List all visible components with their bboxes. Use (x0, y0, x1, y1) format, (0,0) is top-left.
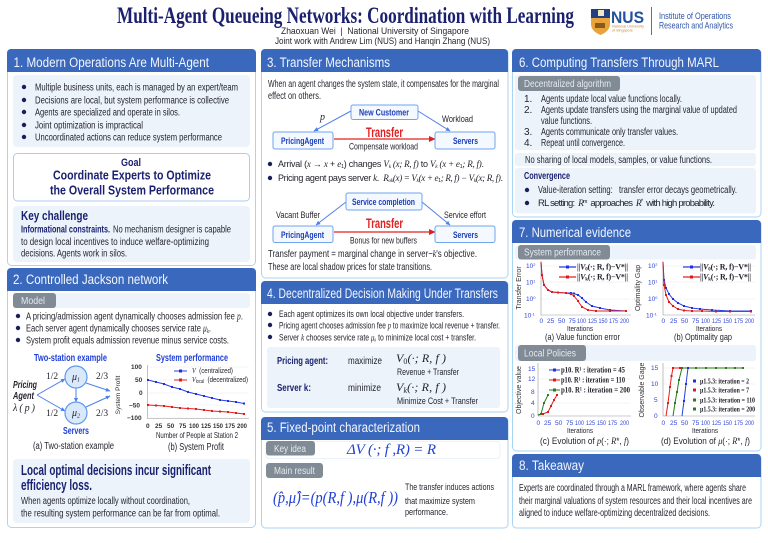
algorithm: value functions. (541, 116, 592, 127)
title: Multi-Agent Queueing Networks: Coordination with Learning (117, 3, 574, 29)
main result: The transfer induces actions (405, 482, 494, 493)
bullet list: Multiple business units, each is managed by an expert/team (35, 82, 238, 94)
chart b: optimality gap: (·; R, f)−V*|| (711, 272, 751, 282)
no sharing note: No sharing of local models, samples, or value functions. (525, 155, 712, 166)
chart d: evolution of mu: 100 (701, 420, 710, 427)
chart b: optimality gap: ||V (700, 272, 708, 282)
chart: system profit: 0 (146, 423, 150, 430)
authors: Zhaoxuan Wei | National University of Singapore (281, 26, 469, 36)
two-station diagram: μ (72, 372, 77, 383)
chart c: evolution of p: Objective value (516, 366, 523, 414)
chart b: optimality gap: 125 (712, 318, 721, 325)
NUS logo: Research and Analytics (659, 20, 733, 32)
chart c: evolution of p: 175 (608, 420, 617, 427)
chart a: value function error: 10 (526, 296, 533, 303)
convergence: RL setting: R (538, 198, 584, 209)
algorithm: Agents update local value functions locally. (541, 94, 682, 105)
objectives box: Server k: (277, 383, 311, 394)
chart c: evolution of p: (c) Evolution of p(·; R*, f) (540, 436, 629, 447)
diagram: service completion: Servers (453, 230, 478, 241)
chart: system profit: 150 (213, 423, 223, 430)
two-station diagram: Two-station example (34, 353, 107, 364)
chart: system profit: 100 (189, 423, 199, 430)
diagram: new customer: Servers (453, 136, 478, 147)
two-station diagram: (a) Two-station example (33, 441, 114, 452)
bullets (268, 309, 500, 344)
algorithm: 2. (524, 105, 532, 116)
chart a: value function error: 75 (568, 318, 576, 325)
arrival bullets: k (435, 164, 438, 170)
chart c: evolution of p: 0 (536, 420, 540, 427)
arrival bullets: (x + e (419, 173, 438, 183)
authors (275, 26, 490, 46)
chart a: value function error: 1 (533, 278, 536, 284)
arrival bullets: ) changes (344, 159, 384, 169)
panel: 1 modern operations (7, 49, 256, 266)
main result: (p̂,μ̂)=(p(R,f ),μ(R,f )) (273, 488, 398, 507)
diagram: service completion (273, 193, 495, 246)
system performance label (515, 245, 756, 260)
chart b: optimality gap: 175 (734, 318, 743, 325)
chart a: value function error: 100 (577, 318, 586, 325)
goal box: Coordinate Experts to Optimize (53, 168, 211, 182)
bullet list: Agents are specialized and operate in silos. (35, 108, 180, 118)
chart c: evolution of p: 100 (575, 420, 584, 427)
arrival bullets: to V (421, 159, 436, 169)
bullets: k (374, 338, 377, 344)
chart a: value function error: Transfer Error (516, 266, 523, 310)
chart a: value function error: 150 (598, 318, 608, 325)
arrival bullets: V (383, 159, 390, 169)
chart b: optimality gap: 10 (646, 312, 653, 320)
heading 3: 3. Transfer Mechanisms (267, 55, 390, 70)
bullet list (13, 75, 250, 147)
convergence (515, 168, 756, 214)
arrival bullets: 1 (341, 164, 344, 170)
diagram: service completion: Bonus for new buffers (350, 236, 417, 246)
chart a: value function error: 200 (620, 318, 629, 325)
key challenge box: Key challenge (21, 208, 88, 223)
local policies label (515, 345, 756, 361)
chart b: optimality gap: 75 (692, 318, 700, 325)
chart c: evolution of p: p10. R¹ : iteration = 45 (561, 366, 625, 374)
bullet list: Decisions are local, but system performance is collective (35, 96, 229, 106)
arrival bullets: (x; R, f) (476, 173, 501, 183)
diagram: new customer: p (319, 112, 325, 123)
arrival bullets: k (417, 178, 420, 184)
key idea (266, 441, 500, 458)
chart c: evolution of p: p10. R¹ : iteration = 200 (561, 386, 630, 394)
chart d: evolution of mu: 75 (692, 420, 700, 427)
model bullets: Each server agent dynamically chooses service rate μ (26, 324, 257, 334)
key idea: Key idea (274, 444, 306, 455)
chart d: evolution of mu: 0 (654, 413, 658, 420)
chart b: optimality gap: 2 (655, 262, 658, 267)
diagram: new customer: Transfer (366, 125, 404, 140)
chart: system profit: −50 (129, 402, 140, 410)
chart a: value function error: (a) Value function error (545, 332, 620, 343)
panel: 2 controlled Jackson network (7, 268, 256, 528)
model bullets: A pricing/admission agent dynamically chooses admission fee p. (26, 312, 243, 322)
bullets: Each agent optimizes its own local objective under transfers. (279, 309, 464, 320)
chart d: evolution of mu: 5 (654, 397, 658, 404)
chart c: evolution of p: 75 (566, 420, 574, 427)
chart: system profit: 100 (131, 364, 142, 371)
arrival bullets: Arrival (x → x + e (278, 159, 341, 169)
two-station diagram: μ (72, 408, 77, 419)
chart b: optimality gap: 25 (670, 318, 678, 325)
chart b: optimality gap: 150 (723, 318, 732, 325)
chart c: evolution of p: 15 (528, 366, 536, 373)
diagram: service completion: PricingAgent (281, 230, 325, 241)
key challenge box (13, 206, 250, 262)
NUS logo: NUS (611, 8, 644, 27)
chart d: evolution of mu: μ1.5.3: iteration = 2 (700, 376, 749, 386)
shadow price note: These are local shadow prices for state transitions. (268, 262, 432, 273)
arrival bullets: k (389, 164, 392, 170)
panel: 7 numerical evidence (512, 220, 761, 451)
NUS logo: National University (612, 24, 644, 28)
chart: system profit: −100 (127, 415, 142, 422)
key challenge box: No mechanism designer is capable (113, 224, 231, 236)
bullet list: Joint optimization is impractical (35, 120, 143, 132)
two-station diagram: 1 (77, 378, 80, 384)
key challenge box: Informational constraints. (21, 224, 110, 236)
model bullets (16, 312, 243, 346)
bullets: Pricing agent chooses admission fee p to maximize local revenue + transfer. (279, 320, 500, 332)
heading 6: 6. Computing Transfers Through MARL (519, 55, 719, 70)
chart d: evolution of mu: 175 (734, 420, 743, 427)
authors: Joint work with Andrew Lim (NUS) and Hanqin Zhang (NUS) (275, 36, 490, 46)
convergence: * (641, 199, 644, 205)
chart d: evolution of mu: 10 (651, 381, 659, 388)
diagram: new customer (273, 105, 495, 152)
chart d: evolution of mu: (d) Evolution of μ(·; R*, f) (661, 436, 750, 447)
chart d: evolution of mu: 150 (723, 420, 732, 427)
convergence: approaches (587, 198, 637, 209)
efficiency loss callout: efficiency loss. (21, 478, 92, 494)
diagram: service completion: Service completion (352, 197, 415, 208)
diagram: service completion: Service effort (444, 210, 486, 220)
efficiency loss callout (13, 459, 250, 523)
chart b: optimality gap: 10 (648, 280, 655, 286)
heading 1: 1. Modern Operations Are Multi-Agent (14, 55, 209, 70)
arrival bullets: ; R, f) (462, 159, 482, 169)
chart: system profit (115, 353, 249, 453)
convergence: Convergence (524, 171, 570, 182)
chart a: value function error: 10 (526, 280, 533, 286)
chart: system profit: 200 (237, 423, 247, 430)
chart a: value function error: -1 (531, 312, 536, 316)
chart d: evolution of mu: 15 (651, 365, 659, 372)
model bullets: System profit equals admission revenue minus service costs. (26, 336, 229, 346)
algorithm: 3. (524, 127, 532, 138)
chart: system profit: 175 (225, 423, 235, 430)
diagram: new customer: Compensate workload (349, 142, 418, 152)
objectives box: Revenue + Transfer (397, 367, 459, 378)
chart d: evolution of mu: 125 (712, 420, 721, 427)
chart: system profit: 0 (139, 390, 143, 397)
chart b: optimality gap: 10 (648, 296, 655, 303)
heading 8: 8. Takeaway (519, 458, 584, 473)
chart: system profit: 25 (155, 423, 163, 430)
chart d: evolution of mu: μ1.5.3: iteration = 110 (700, 396, 755, 404)
bullets: to minimize local cost + transfer. (376, 332, 476, 344)
objectives box: maximize (348, 356, 382, 367)
panel: 6 computing transfers (512, 49, 761, 217)
chart c: evolution of p: p10. R¹ : iteration = 110 (561, 376, 625, 384)
local policies label: Local Policies (524, 348, 576, 360)
heading 5: 5. Fixed-point characterization (267, 420, 420, 435)
chart: system profit: 50 (135, 377, 143, 384)
chart d: evolution of mu (639, 362, 755, 447)
chart c: evolution of p: 200 (620, 420, 629, 427)
arrival bullets: ok (388, 178, 394, 184)
chart b: optimality gap: k (708, 278, 711, 282)
goal box: the Overall System Performance (50, 184, 214, 198)
chart b: optimality gap: ||V (700, 262, 708, 272)
arrival bullets: Pricing agent pays server k. R (278, 173, 389, 183)
chart a: value function error: 10 (524, 312, 531, 320)
chart a: value function error: 10 (526, 263, 533, 270)
chart a: value function error: ||V (577, 262, 585, 272)
panel: 8 takeaway (512, 454, 761, 528)
chart b: optimality gap: 10 (648, 263, 655, 270)
key challenge box: decisions. Agents work in silos. (21, 248, 127, 260)
diagram: new customer: New Customer (359, 108, 409, 118)
chart a: value function error: 2 (533, 262, 536, 267)
NUS logo (591, 7, 733, 35)
bullet list: Uncoordinated actions can reduce system performance (35, 132, 222, 144)
two-station diagram (12, 353, 114, 452)
goal box: Goal (121, 157, 141, 169)
chart b: optimality gap: (b) Optimality gap (674, 332, 732, 343)
chart: system profit: 50 (167, 423, 175, 430)
chart a: value function error: 0 (540, 318, 544, 325)
convergence: with high probability. (642, 198, 715, 209)
objectives box: k (403, 386, 407, 395)
objectives box: Pricing agent: (277, 356, 328, 367)
chart a: value function error: 125 (588, 318, 597, 325)
chart a: value function error: Iterations (567, 324, 593, 333)
chart: system profit: 125 (201, 423, 211, 430)
algorithm: Agents communicate only transfer values. (541, 127, 678, 138)
chart: system profit: V (192, 375, 197, 384)
chart c: evolution of p: 125 (586, 420, 595, 427)
two-station diagram: 2 (77, 414, 80, 420)
chart b: optimality gap: 50 (681, 318, 689, 325)
shadow price note: Transfer payment = marginal change in server−k's objective. (268, 249, 477, 260)
main result: performance. (405, 507, 448, 518)
chart d: evolution of mu: Iterations (692, 426, 718, 435)
chart c: evolution of p: 8 (531, 389, 535, 396)
objectives box: Minimize Cost + Transfer (397, 396, 478, 407)
chart a: value function error: 175 (609, 318, 618, 325)
algorithm: 1. (524, 94, 532, 105)
two-station diagram: Agent (12, 391, 34, 402)
two-station diagram: Servers (63, 426, 89, 437)
chart c: evolution of p (516, 363, 631, 447)
model bullets: . (209, 324, 211, 334)
efficiency loss callout: the resulting system performance can be far from optimal. (21, 508, 220, 520)
chart c: evolution of p: 50 (555, 420, 563, 427)
chart d: evolution of mu: 200 (745, 420, 754, 427)
chart a: value function error: 50 (558, 318, 566, 325)
model label: Model (21, 296, 45, 307)
objectives box: (·; R, f ) (408, 351, 446, 365)
algorithm (515, 75, 756, 150)
chart: system profit: local (196, 379, 204, 385)
convergence: m (583, 199, 588, 205)
diagram: new customer: PricingAgent (281, 136, 325, 147)
chart: system profit: V (centralized) (192, 366, 233, 375)
chart: system profit: 75 (179, 423, 187, 430)
objectives box: 0 (403, 357, 407, 366)
chart a: value function error: ||V (577, 272, 585, 282)
arrival bullets: ; R, f) − V (441, 173, 476, 183)
chart a: value function error: (·; R, f)−V*|| (588, 272, 628, 282)
chart b: optimality gap: Iterations (696, 324, 722, 333)
main result: Main result (274, 466, 315, 477)
key challenge box: to design local incentives to induce welfare-optimizing (21, 237, 209, 248)
diagram: service completion: Transfer (366, 216, 404, 231)
chart b: optimality gap: (·; R, f)−V*|| (711, 262, 751, 272)
system performance label: System performance (524, 248, 601, 258)
chart b: optimality gap: 0 (655, 295, 658, 300)
chart: system profit: (b) System Profit (168, 442, 224, 453)
chart b: optimality gap: Optimality Gap (635, 265, 642, 311)
chart: system profit: System performance (156, 353, 228, 364)
goal box (14, 154, 250, 201)
chart a: value function error: 0 (533, 295, 536, 300)
algorithm: Decentralized algorithm (524, 79, 611, 90)
arrival bullets: k (474, 178, 477, 184)
intro text: effect on others. (268, 91, 321, 102)
NUS logo: Institute of Operations (659, 11, 731, 22)
arrival bullets: (x; R, f) (391, 159, 419, 169)
algorithm: Repeat until convergence. (541, 138, 625, 149)
model label (13, 293, 250, 308)
chart b: optimality gap: 0 (662, 318, 666, 325)
chart d: evolution of mu: 50 (681, 420, 689, 427)
two-station diagram: λ ( p ) (12, 403, 36, 414)
takeaway text (519, 483, 752, 519)
chart b: optimality gap: 1 (655, 278, 658, 284)
model bullets: k (207, 329, 209, 335)
chart c: evolution of p: 150 (597, 420, 606, 427)
chart a: value function error: 0 (585, 268, 588, 272)
panel: 3 transfer mechanisms (261, 49, 508, 278)
chart c: evolution of p: 0 (531, 413, 535, 420)
algorithm: 4. (524, 138, 532, 149)
arrival bullets: 1 (438, 178, 441, 184)
main result (266, 463, 494, 518)
main result: that maximize system (405, 496, 475, 507)
diagram: service completion: Vacant Buffer (276, 210, 320, 220)
panel: 5 fixed point (261, 417, 508, 528)
panel: 4 decentralized decision making (261, 281, 508, 412)
two-station diagram: 2/3 (96, 372, 108, 382)
chart d: evolution of mu: μ1.5.3: iteration = 7 (700, 386, 749, 394)
two-station diagram: Pricing (13, 380, 37, 391)
arrival bullets: (x) = V (393, 173, 418, 183)
chart c: evolution of p: Iterations (567, 426, 593, 435)
arrival bullets: . (481, 159, 484, 169)
shadow price note (268, 249, 477, 273)
arrival bullets: . (500, 173, 503, 183)
chart: system profit: System Profit (115, 375, 122, 414)
intro text: When an agent changes the system state, it compensates for the marginal (268, 79, 499, 90)
chart a: value function error: (·; R, f)−V*|| (588, 262, 628, 272)
chart: system profit: (decentralized) (204, 375, 248, 384)
chart d: evolution of mu: 25 (670, 420, 678, 427)
chart b: optimality gap: -1 (653, 312, 658, 316)
efficiency loss callout: Local optimal decisions incur significant (21, 463, 211, 479)
arrival bullets: 1 (460, 164, 463, 170)
chart a: value function error: k (585, 278, 588, 282)
intro text (268, 79, 499, 102)
two-station diagram: 2/3 (96, 409, 108, 419)
objectives box: (·; R, f ) (407, 380, 446, 394)
chart d: evolution of mu: 0 (662, 420, 666, 427)
objectives box: minimize (348, 383, 381, 394)
chart b: optimality gap: 200 (745, 318, 754, 325)
chart: system profit: Number of People at Station 2 (156, 431, 238, 440)
chart b: optimality gap: 100 (701, 318, 710, 325)
arrival bullets (268, 159, 503, 184)
chart b: optimality gap (635, 261, 755, 343)
arrival bullets: (x + e (438, 159, 460, 169)
chart a: value function error (516, 261, 631, 343)
chart c: evolution of p: 4 (531, 400, 535, 407)
chart c: evolution of p: 25 (544, 420, 552, 427)
chart a: value function error: 25 (547, 318, 555, 325)
heading 7: 7. Numerical evidence (519, 225, 631, 240)
bullets: Server k chooses service rate μ (279, 332, 394, 344)
convergence: R (635, 199, 642, 209)
heading 2: 2. Controlled Jackson network (13, 272, 168, 287)
NUS logo: of Singapore (612, 28, 633, 32)
objectives box: V (396, 380, 403, 394)
heading 4: 4. Decentralized Decision Making Under Transfers (267, 286, 498, 301)
key idea: ΔV (·; f ,R) = R (346, 442, 436, 458)
chart b: optimality gap: 0 (708, 268, 711, 272)
objectives box: V (396, 351, 403, 365)
diagram: new customer: Workload (442, 114, 473, 124)
two-station diagram: 1/2 (46, 372, 58, 382)
chart d: evolution of mu: Observable Gage (639, 362, 646, 417)
chart c: evolution of p: 12 (528, 376, 536, 383)
two-station diagram: 1/2 (46, 409, 58, 419)
efficiency loss callout: When agents optimize locally without coordination, (21, 496, 190, 507)
objectives box (267, 347, 500, 408)
